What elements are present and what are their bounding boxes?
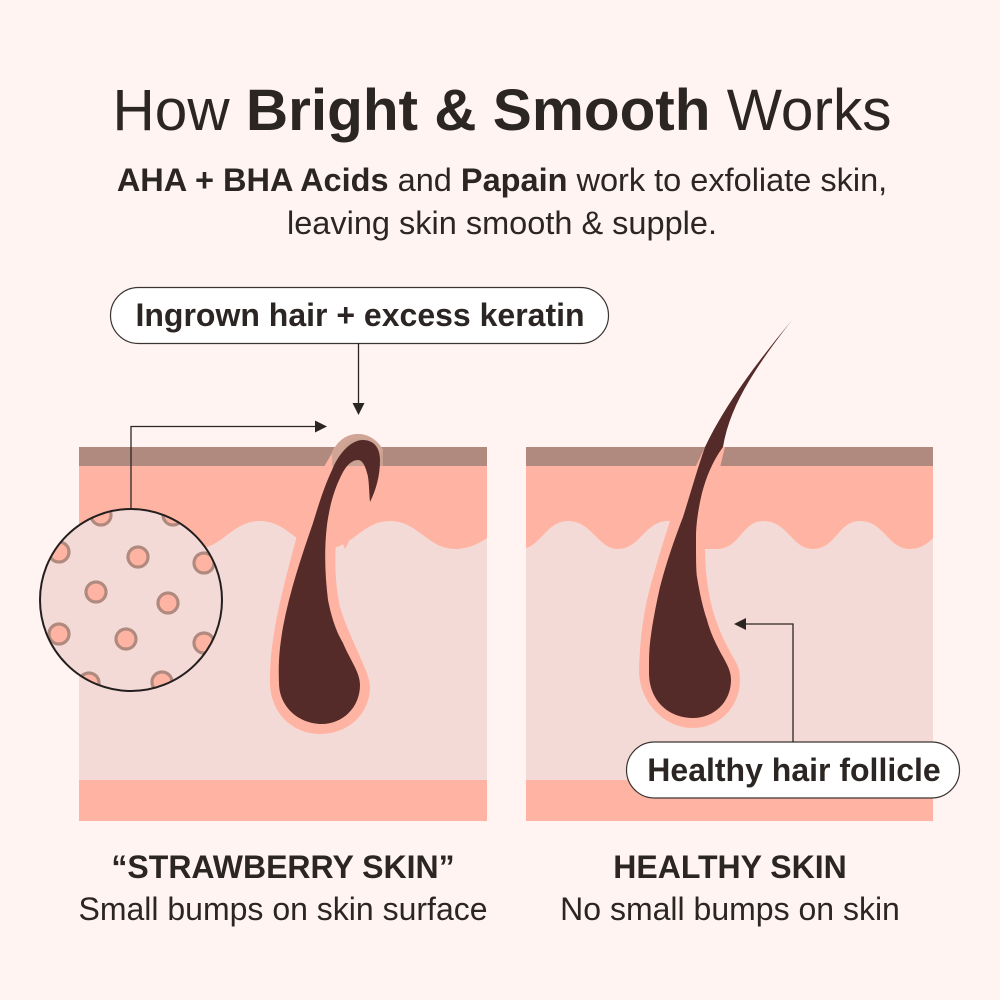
subtitle: AHA + BHA Acids and Papain work to exfoliate skin,	[117, 162, 887, 198]
callout: healthy hair follicle: Healthy hair follicle	[647, 752, 941, 788]
caption: healthy skin: No small bumps on skin	[560, 891, 900, 927]
ingrown follicle outline	[270, 434, 383, 734]
skin layers	[79, 447, 487, 821]
title: How Bright & Smooth Works	[113, 78, 891, 143]
caption: strawberry skin: Small bumps on skin surface	[78, 891, 488, 927]
healthy hair	[649, 320, 792, 718]
subtitle: leaving skin smooth & supple.	[287, 205, 717, 241]
ingrown hair	[279, 440, 380, 724]
arrow: magnifier to bump	[131, 420, 327, 509]
caption: healthy skin: HEALTHY SKIN	[613, 849, 847, 885]
caption: strawberry skin	[78, 849, 488, 927]
panel: healthy skin diagram	[526, 320, 933, 821]
skin layers	[526, 447, 933, 821]
callout: ingrown hair: Ingrown hair + excess keratin	[135, 297, 585, 333]
arrow: callout to bump	[352, 343, 364, 415]
arrow: callout to follicle	[734, 618, 793, 742]
callout: ingrown hair	[110, 288, 608, 344]
caption: strawberry skin: “STRAWBERRY SKIN”	[111, 849, 455, 885]
callout: healthy hair follicle	[626, 742, 960, 798]
subtitle	[117, 162, 887, 241]
healthy follicle outline	[639, 447, 740, 728]
panel: strawberry skin diagram	[40, 420, 487, 821]
magnifier circle with bumps	[40, 505, 222, 693]
caption: healthy skin	[560, 849, 900, 927]
bump over top band	[332, 434, 383, 466]
